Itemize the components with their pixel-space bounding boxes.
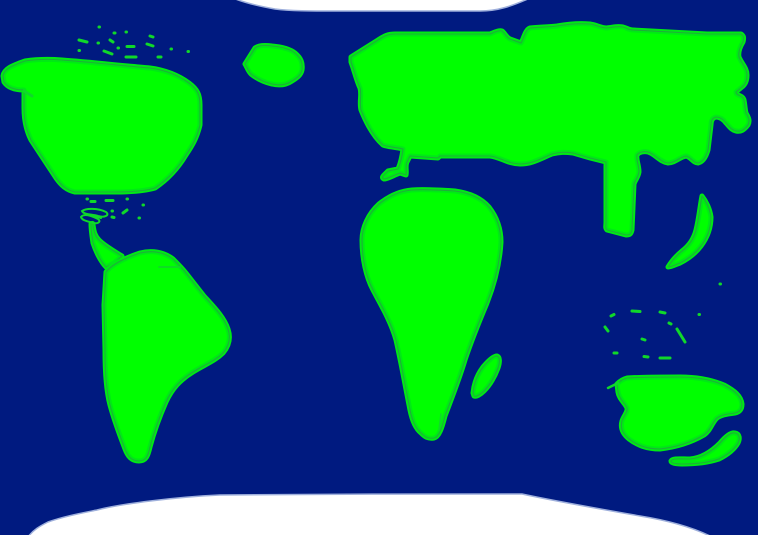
ice cap: antarctica [28, 494, 712, 535]
islands: caribbean [87, 199, 144, 218]
landmass: eastern crescent island [668, 196, 711, 267]
islands: pacific chain [605, 284, 720, 358]
islands: arctic archipelago [79, 27, 188, 57]
islands: caribbean loops [81, 209, 107, 223]
ice cap: arctic [233, 0, 530, 11]
landmass: africa [362, 190, 501, 438]
landmass: australia [608, 377, 742, 449]
landmass: eurasia [351, 24, 749, 235]
landmass: madagascar [473, 356, 499, 396]
landmass: southern island [671, 433, 739, 464]
landmass: central america [91, 223, 122, 267]
landmass: south america [104, 252, 229, 461]
landmass: north america [3, 59, 200, 192]
landmass: greenland [245, 45, 302, 85]
